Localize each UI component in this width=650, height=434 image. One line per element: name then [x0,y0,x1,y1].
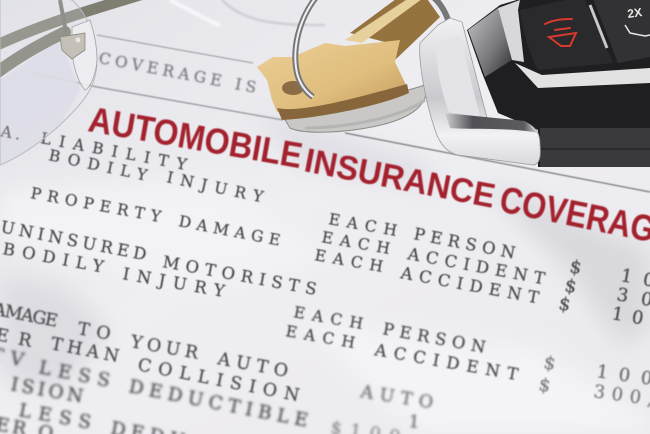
policy text: right column lower [284,303,650,410]
policy text: right column lower: $ [537,374,552,397]
policy text: damage to your auto: YOUR [128,332,200,364]
icon: key blade [350,0,440,60]
policy text: right column upper [313,210,650,333]
icon: key edge shadow [277,84,409,120]
policy text: left column upper: BODILY [1,239,106,277]
policy text: deductible lines: DEDUCTIBLE [127,376,310,432]
policy text: left column upper: INJURY [165,168,266,206]
fob speckled highlight [468,8,512,77]
icon: loop opening [436,36,480,117]
icon: red horn [545,19,576,46]
heading: automobile insurance coverage: INSURANCE [301,142,498,216]
policy text: right column upper: ACCIDENT [398,263,540,307]
policy text: right column upper: EACH [313,246,384,276]
policy text: right column upper: EACH [327,210,398,240]
policy text: right column upper: $ [557,293,572,316]
heading: automobile insurance coverage [86,98,650,254]
policy text: left column upper: BODILY [47,146,149,185]
policy text: deductible lines: 1 [408,412,420,433]
policy text: damage to your auto: AUTO [215,349,290,382]
policy text: right column upper: $ [563,275,578,298]
policy text: damage to your auto [0,297,301,406]
top glass lens [170,0,325,26]
heading: automobile insurance coverage: AUTOMOBILE [86,98,305,176]
icon: glasses rim highlight [72,20,97,90]
policy text: damage to your auto: TO [76,319,112,345]
eyeglasses [0,0,140,165]
car keys [257,0,454,132]
policy text: right column upper: EACH [320,228,391,258]
silver key behind [284,85,426,132]
policy text: right column lower: EACH [284,322,356,352]
fob silver strip [515,63,650,88]
policy text: left column upper: UNINSURED [0,217,148,264]
policy text: deductible lines: ISION [9,374,85,408]
policy text: right column lower: PERSON [381,319,487,357]
icon: lens tint lower [0,40,80,165]
policy text: deductible lines: LESS [37,357,112,392]
policy text: right column lower: $ [542,352,557,375]
policy text: damage to your auto: COLLISION [136,355,301,406]
fob lower edge [540,128,650,167]
icon: key hole [282,81,304,95]
policy text: deductible lines: AUTO [358,382,434,413]
policy text: right column upper: PERSON [412,224,517,263]
icon: glasses lens [0,0,97,165]
policy text: right column lower: ACCIDENT [372,340,519,384]
fob chrome ridge [498,0,524,62]
icon: glasses hinge [60,0,85,59]
icon: key ring [295,0,454,97]
policy text: right column lower: EACH [292,303,364,333]
icon: glasses arms [0,0,140,74]
policy text: deductible lines: LESS [17,400,93,434]
form rules [28,35,650,192]
policy text: right column upper: $ [568,256,583,279]
text: coverage is: COVERAGE IS [97,49,258,97]
fob body [467,0,650,167]
policy text: left column upper: LIABILITY [39,129,189,174]
button: remote start [590,0,650,63]
policy text: left column upper: MOTORISTS [161,252,318,299]
button: remote start: 2X [626,5,643,21]
icon: loop dark reflection [445,113,538,133]
icon: silver key loop [420,18,540,165]
car key fob [420,0,650,167]
policy text: left column upper: PROPERTY [29,184,163,226]
policy text: deductible lines [0,344,434,434]
policy text: damage to your auto: THAN [49,334,121,367]
button: panic [520,0,613,70]
policy text: left column upper: INJURY [121,264,227,301]
policy text: left column upper: DAMAGE [177,212,282,250]
policy text: left column upper [0,122,318,301]
icon: gold key head [257,40,407,112]
policy text: right column upper: ACCIDENT [405,244,546,288]
